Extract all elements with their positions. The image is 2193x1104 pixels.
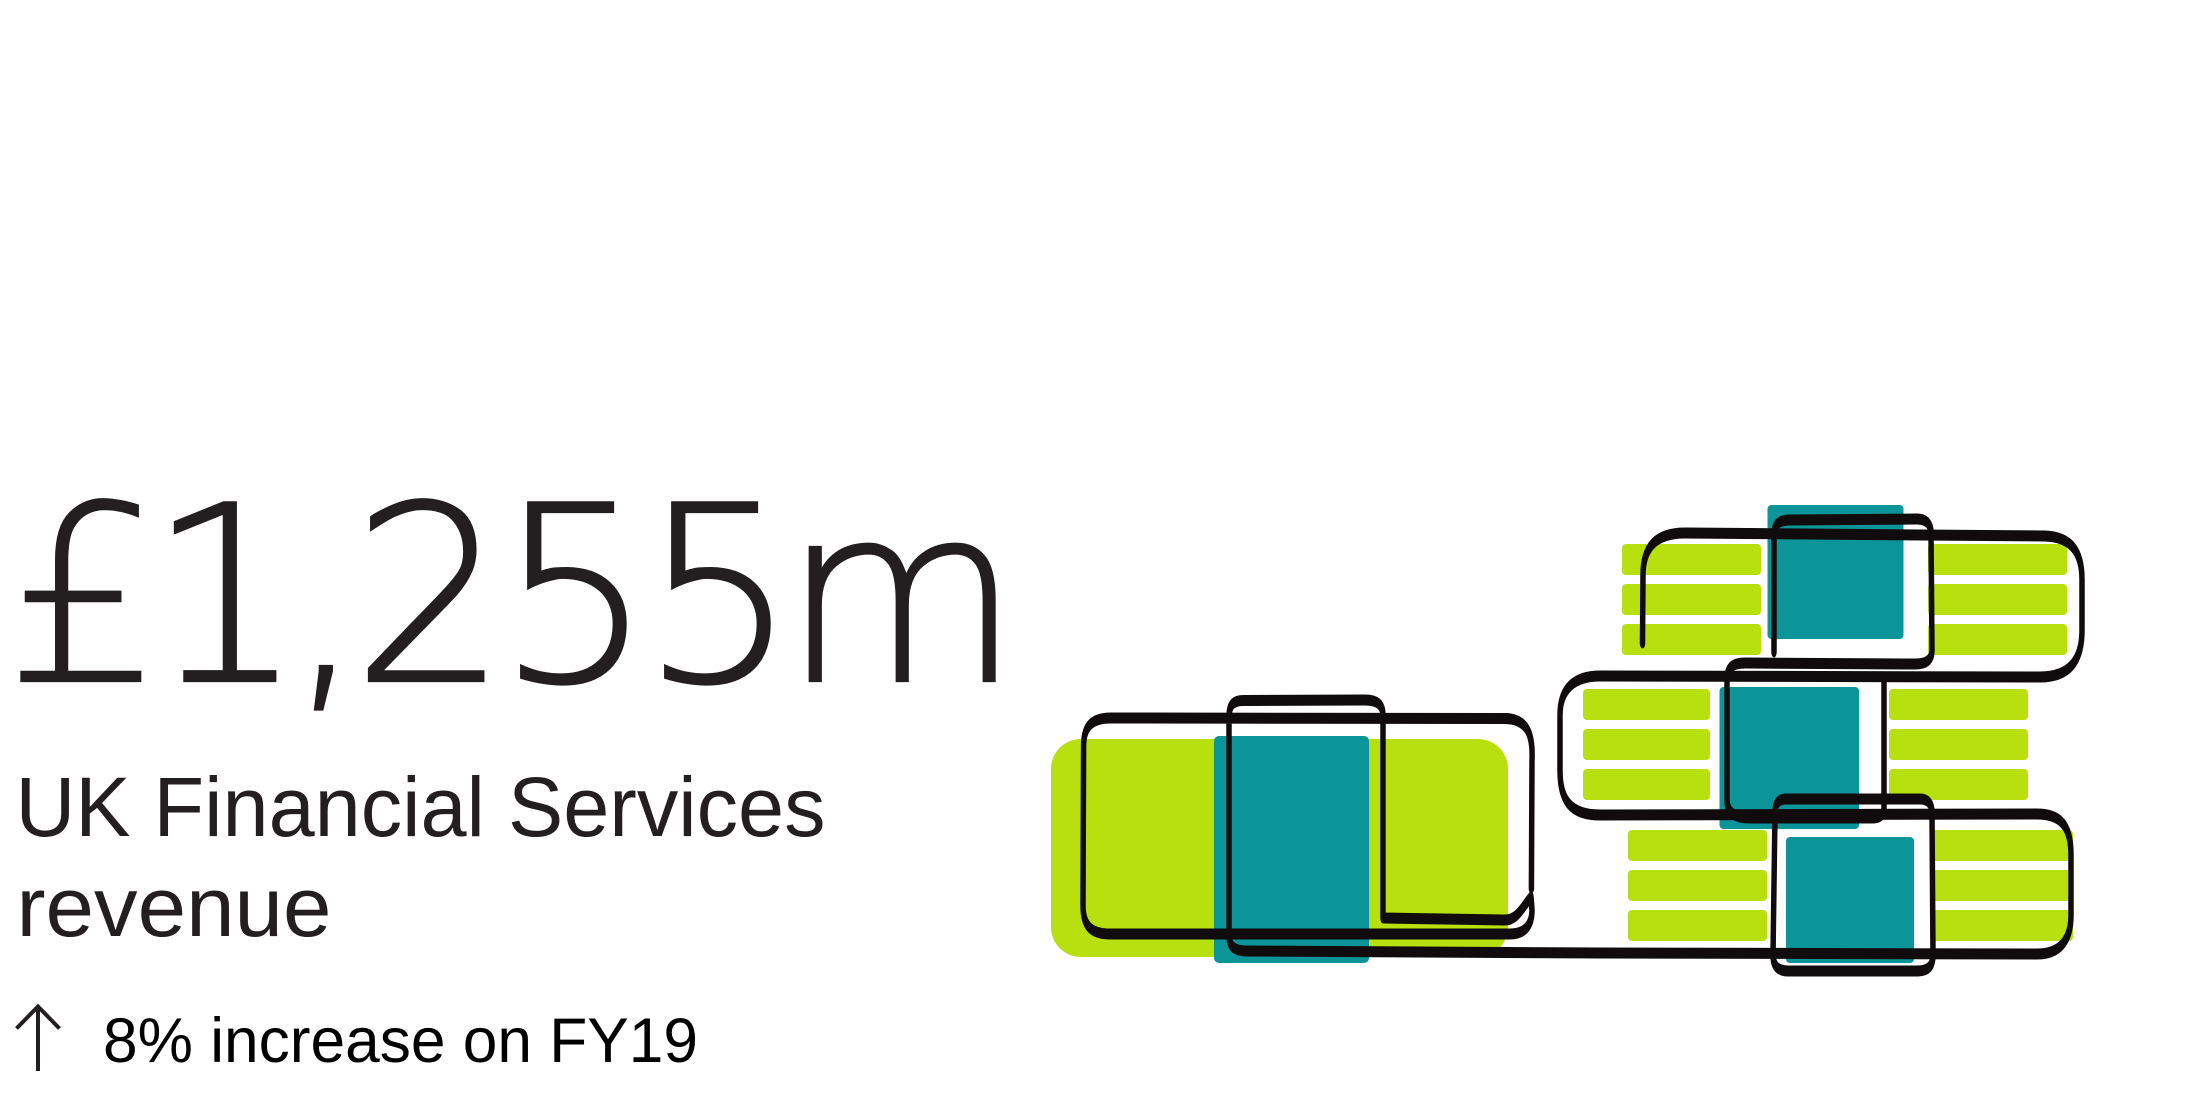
large banknote: lime: [1051, 739, 1508, 957]
headline figure: £1,255m: [6, 454, 1021, 739]
bottom stack: [1628, 830, 2073, 963]
label: UK Financial Services revenue: [16, 760, 826, 954]
hand-drawn outline: [1083, 519, 2082, 971]
middle stack: [1583, 687, 2028, 829]
top stack: [1622, 505, 2067, 655]
label: UK Financial Services revenue: UK Financial Services: [16, 760, 826, 854]
large banknote band: teal: [1214, 736, 1369, 963]
change note: 8% increase on FY19: [103, 1006, 698, 1076]
icon: up arrow: [16, 1006, 60, 1071]
label: UK Financial Services revenue: revenue: [16, 860, 331, 954]
illustration: stacks of banknotes and coins: [1051, 505, 2082, 971]
